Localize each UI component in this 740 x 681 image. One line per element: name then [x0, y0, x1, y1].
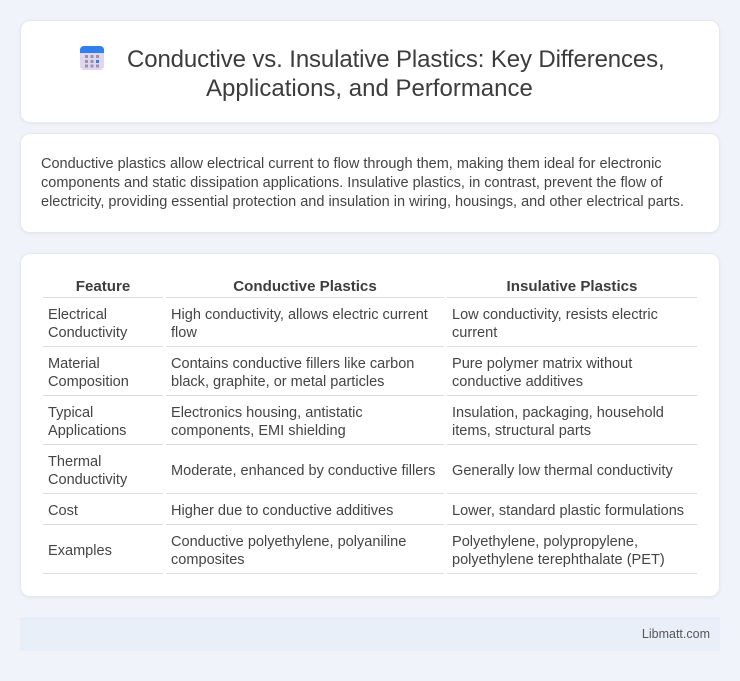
cell: conductive thermal: Moderate, enhanced by conductive fillers: [171, 463, 435, 479]
cell: conductive composition: [171, 356, 414, 390]
cell: insulative cost: Lower, standard plastic formulations: [452, 503, 684, 519]
cell: insulative applications: Insulation, packaging, household: [452, 405, 664, 421]
panel: introduction card: [20, 133, 720, 233]
cell: conductive composition: black, graphite, or metal particles: [171, 374, 384, 390]
row: thermal conductivity: [48, 454, 128, 488]
title: Conductive vs. Insulative Plastics: Key Differences,: [127, 46, 665, 73]
row: cost: Cost: [48, 503, 78, 519]
row: examples: Examples: [48, 543, 112, 559]
cell: conductive conductivity: [171, 307, 428, 341]
cell: insulative composition: [452, 356, 632, 390]
row: electrical conductivity: Electrical: [48, 307, 107, 323]
cell: insulative applications: [452, 405, 664, 439]
cell: conductive examples: Conductive polyethylene, polyaniline: [171, 534, 406, 550]
row: material composition: Material: [48, 356, 100, 372]
row: typical applications: Typical: [48, 405, 93, 421]
row: thermal conductivity: Thermal: [48, 454, 101, 470]
cell: insulative applications: items, structural parts: [452, 423, 591, 439]
row: typical applications: Applications: [48, 423, 126, 439]
row: electrical conductivity: [48, 307, 128, 341]
cell: insulative composition: conductive additives: [452, 374, 583, 390]
cell: insulative conductivity: [452, 307, 658, 341]
cell: insulative examples: Polyethylene, polypropylene,: [452, 534, 638, 550]
row: material composition: Composition: [48, 374, 129, 390]
cell: conductive applications: [171, 405, 363, 439]
title: [127, 46, 665, 102]
cell: conductive conductivity: flow: [171, 325, 197, 341]
cell: conductive composition: Contains conductive fillers like carbon: [171, 356, 414, 372]
row: thermal conductivity: Conductivity: [48, 472, 127, 488]
icon: calendar grid: [80, 46, 104, 70]
text block: introduction: Conductive plastics allow electrical current to flow through them, making them ideal for electronic: [41, 156, 662, 172]
row: electrical conductivity: Conductivity: [48, 325, 127, 341]
cell: insulative composition: Pure polymer matrix without: [452, 356, 632, 372]
cell: insulative examples: [452, 534, 665, 568]
cell: insulative conductivity: Low conductivity, resists electric: [452, 307, 658, 323]
table header: feature: Feature: [76, 278, 130, 295]
table header: conductive plastics: Conductive Plastics: [233, 278, 377, 295]
cell: conductive applications: components, EMI shielding: [171, 423, 346, 439]
text block: introduction: components and static dissipation applications. Insulative plastics, in contrast, prevent the flow of: [41, 175, 662, 191]
title: Applications, and Performance: [206, 75, 533, 102]
text block: introduction: [41, 156, 684, 210]
row: typical applications: [48, 405, 126, 439]
panel: title card: [20, 20, 720, 123]
cell: conductive cost: Higher due to conductive additives: [171, 503, 393, 519]
cell: conductive examples: composites: [171, 552, 245, 568]
cell: conductive applications: Electronics housing, antistatic: [171, 405, 363, 421]
cell: conductive examples: [171, 534, 406, 568]
cell: conductive conductivity: High conductivity, allows electric current: [171, 307, 428, 323]
footer bar: [20, 617, 720, 651]
panel: comparison table: [20, 253, 720, 597]
text block: introduction: electricity, providing essential protection and insulation in wiring, housings, and other electrical parts.: [41, 194, 684, 210]
table header: insulative plastics: Insulative Plastics: [507, 278, 637, 295]
footer text: Libmatt.com: [642, 627, 710, 641]
cell: insulative examples: polyethylene terephthalate (PET): [452, 552, 665, 568]
cell: insulative thermal: Generally low thermal conductivity: [452, 463, 673, 479]
row: material composition: [48, 356, 129, 390]
cell: insulative conductivity: current: [452, 325, 497, 341]
